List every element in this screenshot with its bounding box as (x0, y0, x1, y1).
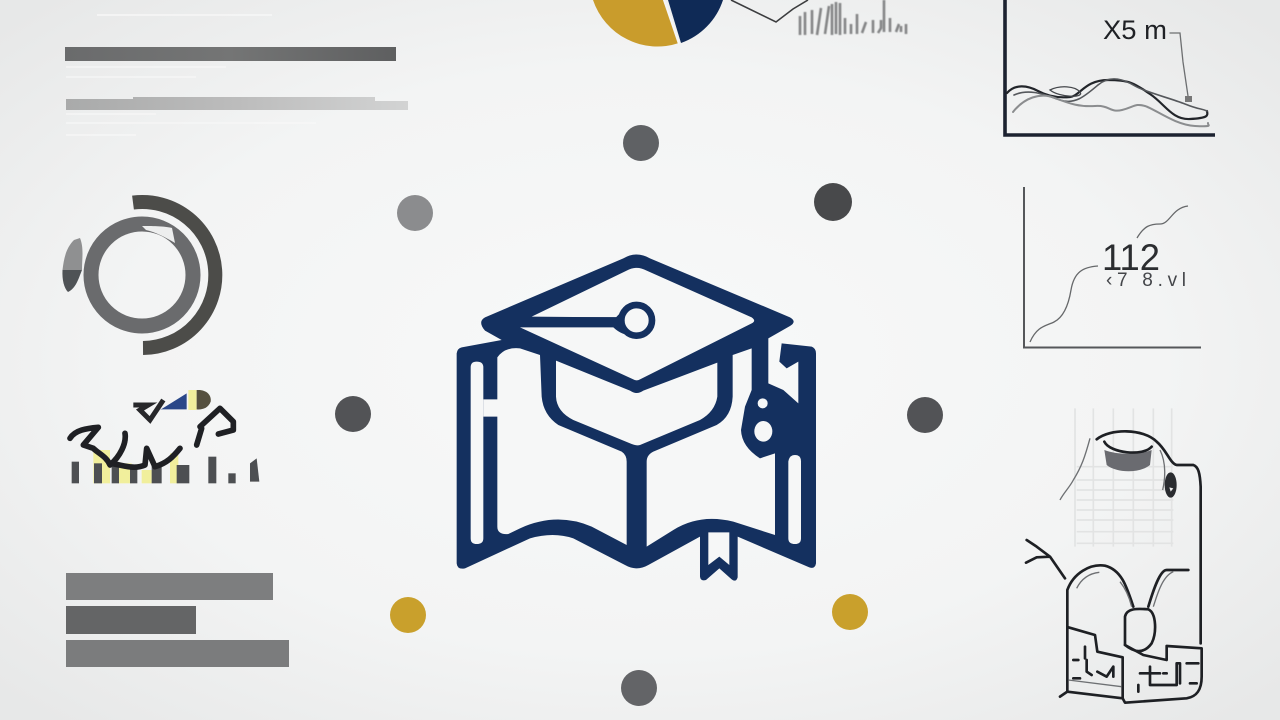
right page (647, 348, 775, 547)
line with arrow (731, 0, 808, 22)
sketch: book and cup (1026, 408, 1202, 703)
dots ring (335, 125, 943, 706)
chart: single rising line (1024, 187, 1201, 348)
chart: single rising line: ‹7 8.vl (1106, 270, 1186, 291)
bar chart: bottom left (66, 573, 289, 667)
right slot (788, 455, 801, 544)
bookmark inner (708, 532, 729, 565)
sketch: abstract figure with bars (70, 390, 259, 483)
pie chart (593, 0, 723, 46)
cap underside (556, 361, 717, 445)
tassel cord and button (531, 305, 652, 336)
dark horizontal bar (65, 47, 396, 61)
faint grid (1075, 408, 1173, 547)
chart label: 112 (1102, 237, 1160, 278)
left page (483, 348, 627, 545)
yellow bars (93, 390, 197, 483)
mini bar sketch (800, 0, 906, 35)
icon: graduation cap on open book (457, 254, 816, 581)
left slot (471, 362, 483, 544)
panel: top left bars (65, 14, 408, 136)
cap top face (520, 268, 754, 380)
chart label: X5 m (1103, 15, 1167, 45)
light horizontal bar (66, 97, 408, 110)
chart: line chart with three curves (1005, 0, 1215, 135)
donut chart (62, 202, 215, 348)
